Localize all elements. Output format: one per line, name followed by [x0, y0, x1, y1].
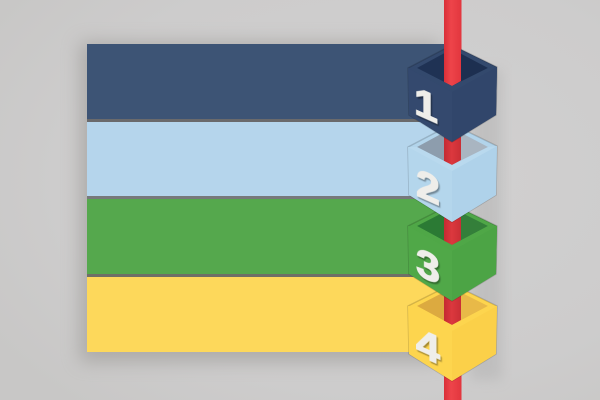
panel: yellow strip	[87, 277, 445, 352]
cube 2: light blue	[408, 120, 497, 222]
number 1: 1	[414, 79, 438, 133]
cube 4: yellow	[408, 280, 497, 381]
number 4: 4	[416, 320, 440, 374]
number 2: 2	[416, 161, 440, 215]
cube 3: green	[408, 200, 497, 301]
panel: navy strip	[87, 44, 445, 122]
panel shadow	[80, 42, 440, 362]
panel: light blue strip	[87, 122, 445, 199]
number 3: 3	[416, 240, 440, 294]
panel: green strip	[87, 199, 445, 277]
cube shadow	[470, 70, 502, 380]
cube 1: navy	[408, 40, 497, 142]
red pole	[444, 0, 462, 400]
